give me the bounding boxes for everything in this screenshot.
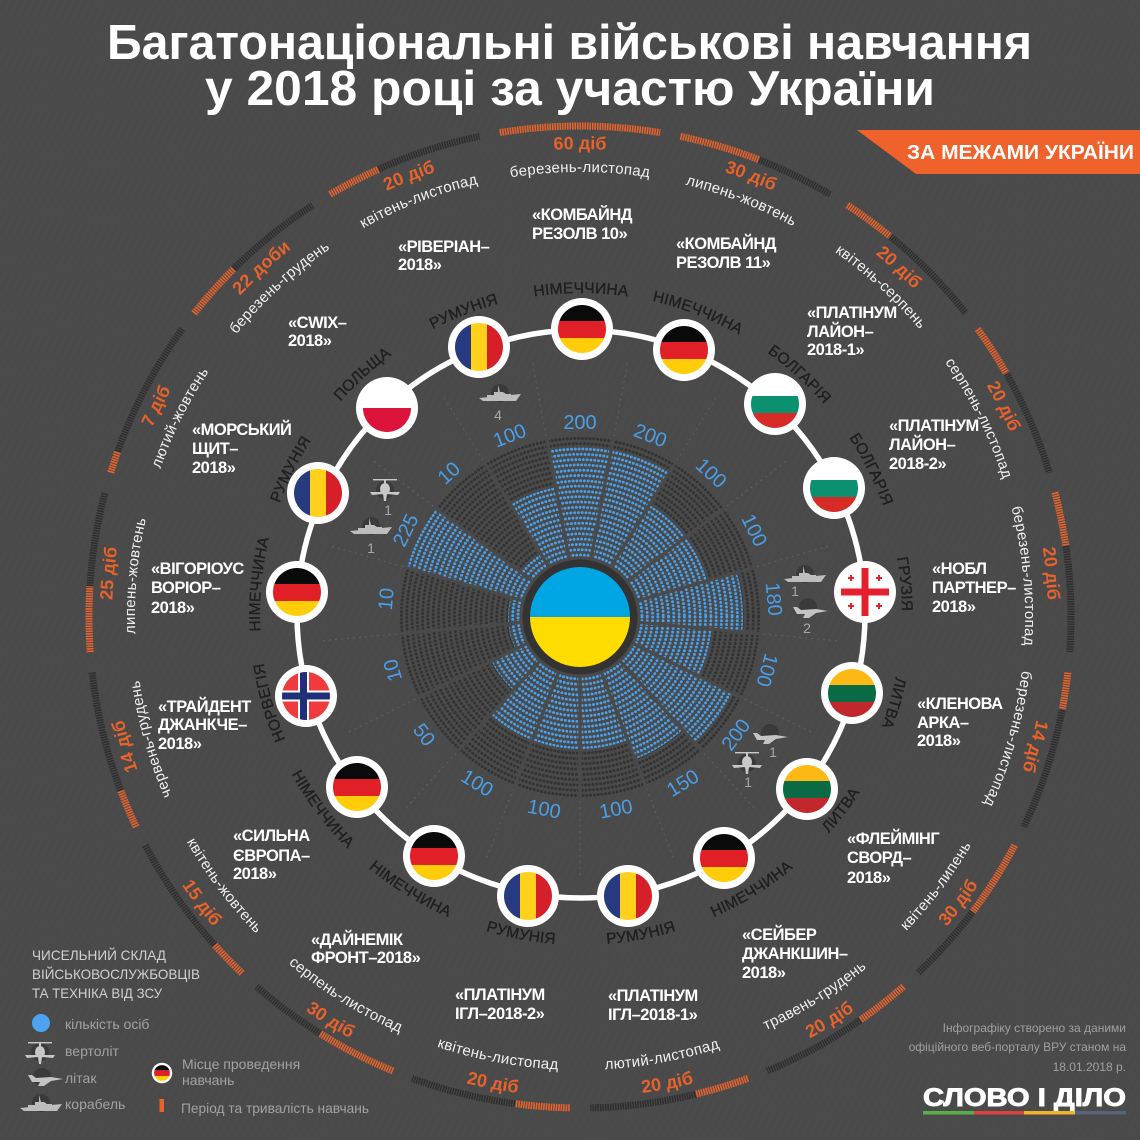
exercise names: «СЕЙБЕР: [742, 926, 816, 944]
exercise names: «ПЛАТІНУМ: [889, 417, 979, 435]
country names: БОЛГАРІЯ: [850, 432, 894, 506]
exercise names: 2018»: [158, 735, 202, 753]
exercise names: ЛАЙОН–: [889, 435, 956, 454]
country names: БОЛГАРІЯ: [768, 344, 832, 404]
exercise names: «ПЛАТІНУМ: [608, 987, 698, 1005]
date ranges: березень-грудень: [223, 234, 334, 339]
logo: СЛОВО І ДІЛО: [923, 1084, 1126, 1112]
personnel counts around the chart: 200: [718, 715, 755, 755]
exercise names: РЕЗОЛВ 11»: [676, 254, 771, 272]
legend: вертоліт: [65, 1043, 120, 1059]
durations in days: 20 діб: [986, 381, 1022, 430]
durations in days: 60 діб: [554, 136, 606, 153]
personnel counts around the chart: [375, 412, 786, 824]
country names: [249, 282, 913, 944]
exercise names: 2018-1»: [807, 341, 864, 359]
exercise names: «КЛЕНОВА: [917, 695, 1003, 713]
personnel counts around the chart: 100: [490, 420, 529, 452]
date ranges: серпень-листопад: [283, 952, 407, 1040]
exercise names: ДЖАНКЧЕ–: [158, 716, 247, 734]
personnel counts around the chart: 225: [389, 511, 424, 550]
legend: навчань: [182, 1072, 234, 1088]
chart: blue personnel dots per exercise: [408, 448, 744, 758]
exercise names: «ФЛЕЙМІНГ: [847, 830, 939, 848]
legend: літак: [65, 1070, 97, 1086]
personnel counts around the chart: 10: [375, 587, 399, 611]
equipment: ships, jets and helicopters with counts: 4: [494, 407, 502, 423]
exercise names: 2018»: [398, 256, 442, 274]
personnel counts around the chart: 100: [751, 651, 782, 689]
legend: ТА ТЕХНІКА ВІД ЗСУ: [32, 985, 162, 1001]
personnel counts around the chart: 10: [380, 656, 407, 684]
personnel counts around the chart: 100: [526, 796, 562, 824]
personnel counts around the chart: 100: [598, 796, 634, 824]
country names: НІМЕЧЧИНА: [370, 860, 449, 918]
equipment: ships, jets and helicopters with counts: [350, 384, 828, 790]
personnel counts around the chart: 100: [457, 766, 497, 802]
date ranges: квітень-листопад: [355, 167, 481, 233]
exercise names: 2018»: [847, 869, 891, 887]
country names: ПОЛЬЩА: [333, 348, 392, 401]
durations in days: 25 діб: [100, 547, 119, 600]
exercise names: «ДАЙНЕМІК: [311, 931, 403, 949]
equipment: ships, jets and helicopters with counts: 1: [769, 744, 777, 760]
source note: офіційного веб-порталу ВРУ станом на: [909, 1040, 1126, 1054]
exercise names: «КОМБАЙНД: [676, 235, 776, 253]
central Ukraine flag: [522, 560, 638, 674]
durations in days: 14 діб: [1024, 720, 1048, 774]
legend: кількість осіб: [65, 1016, 149, 1032]
exercise names: «КОМБАЙНД: [532, 206, 632, 224]
date ranges: березень-листопад: [510, 164, 649, 180]
legend: Період та тривалість навчань: [181, 1100, 369, 1116]
exercise names: 2018»: [288, 332, 332, 350]
equipment: ships, jets and helicopters with counts: 1: [367, 540, 375, 556]
date ranges: квітень-липень: [896, 837, 977, 936]
exercise names: «СИЛЬНА: [233, 827, 310, 845]
date ranges: липень-жовтень: [685, 178, 794, 226]
banner: abroad: [857, 130, 1140, 174]
date ranges: лютий-листопад: [602, 1035, 722, 1077]
personnel counts around the chart: 200: [631, 420, 670, 452]
date ranges: квітень-серпень: [836, 246, 922, 328]
date ranges: квітень-листопад: [435, 1034, 561, 1078]
title: у 2018 році за участю України: [205, 62, 935, 116]
exercise names: ДЖАНКШИН–: [742, 945, 848, 963]
country names: НІМЕЧЧИНА: [534, 282, 628, 296]
country names: НІМЕЧЧИНА: [710, 862, 794, 917]
personnel counts around the chart: 100: [736, 511, 771, 550]
durations in days: 20 діб: [466, 1072, 518, 1094]
durations in days: 20 діб: [384, 160, 434, 191]
title: Багатонаціональні військові навчання: [107, 16, 1032, 70]
sector dividers and spokes: [319, 359, 841, 879]
source note: Інфографіку створено за даними: [943, 1021, 1126, 1035]
country names: РУМУНІЯ: [270, 436, 310, 502]
equipment: ships, jets and helicopters with counts: 2: [803, 620, 811, 636]
exercise names: 2018»: [917, 732, 961, 750]
date ranges: травень-грудень: [759, 956, 872, 1037]
exercise names: 2018»: [192, 459, 236, 477]
durations in days: 20 діб: [1042, 547, 1061, 600]
durations in days: 15 діб: [182, 880, 223, 925]
date ranges: червень-грудень: [123, 677, 176, 802]
equipment: ships, jets and helicopters with counts: 1: [791, 583, 799, 599]
personnel counts around the chart: 100: [691, 454, 730, 493]
country names: НІМЕЧЧИНА: [653, 290, 741, 335]
legend: корабель: [65, 1096, 125, 1112]
legend: ВІЙСЬКОВОСЛУЖБОВЦІВ: [32, 965, 200, 982]
exercise names: ВОРІОР–: [151, 579, 221, 597]
exercise names: «CWIX–: [288, 314, 346, 332]
exercise names: ІГЛ–2018-1»: [608, 1006, 698, 1024]
personnel counts around the chart: 10: [434, 458, 465, 489]
durations in days: 20 діб: [642, 1070, 692, 1093]
durations in days: 30 діб: [938, 878, 976, 926]
exercise names: 2018»: [742, 964, 786, 982]
exercise names: ЛАЙОН–: [807, 322, 874, 341]
durations in days: 20 діб: [806, 1000, 852, 1038]
equipment: ships, jets and helicopters with counts: 1: [744, 774, 752, 790]
durations in days: 14 діб: [110, 721, 138, 772]
banner: abroad: ЗА МЕЖАМИ УКРАЇНИ: [907, 141, 1134, 164]
country names: РУМУНІЯ: [606, 921, 675, 944]
legend: ЧИСЕЛЬНИЙ СКЛАД: [32, 946, 166, 963]
equipment: ships, jets and helicopters with counts: 1: [384, 502, 392, 518]
legend: [20, 946, 369, 1116]
flags of host countries: [266, 298, 896, 927]
source note: 18.01.2018 р.: [1053, 1060, 1126, 1074]
country names: НІМЕЧЧИНА: [249, 538, 270, 631]
durations in days: 20 діб: [876, 246, 922, 288]
exercise names: 2018»: [932, 598, 976, 616]
exercise names: 2018»: [151, 599, 195, 617]
exercise names: ЄВРОПА–: [233, 847, 310, 865]
white ring connecting flags: [297, 330, 865, 898]
exercise names: АРКА–: [917, 714, 969, 732]
date ranges: липень-жовтень: [118, 515, 150, 636]
country names: РУМУНІЯ: [429, 294, 498, 329]
date ranges: квітень-жовтень: [180, 833, 267, 939]
exercise names: [151, 205, 1016, 1024]
title: [107, 16, 1032, 116]
exercise names: РЕЗОЛВ 10»: [532, 225, 627, 243]
exercise names: ПАРТНЕР–: [932, 579, 1016, 597]
personnel counts around the chart: 50: [408, 720, 439, 751]
legend: Місце проведення: [182, 1056, 300, 1072]
durations in days: 30 діб: [726, 161, 778, 190]
exercise names: «ПЛАТІНУМ: [807, 304, 897, 322]
durations in days: [100, 136, 1061, 1094]
exercise names: ІГЛ–2018-2»: [455, 1005, 545, 1023]
exercise names: 2018»: [233, 865, 277, 883]
date ranges: березень-листопад: [1012, 506, 1034, 646]
exercise names: «РІВЕРІАН–: [398, 238, 489, 256]
date ranges: лютий-жовтень: [145, 363, 213, 472]
country names: РУМУНІЯ: [486, 920, 555, 944]
exercise names: «ВІГОРІОУС: [151, 560, 244, 578]
durations in days: 22 доби: [232, 242, 290, 296]
personnel counts around the chart: 180: [761, 581, 786, 617]
date ranges: серпень-листопад: [946, 359, 1010, 480]
exercise names: ФРОНТ–2018»: [311, 949, 421, 967]
exercise names: 2018-2»: [889, 455, 946, 473]
exercise names: «ТРАЙДЕНТ: [158, 698, 251, 716]
personnel counts around the chart: 150: [663, 766, 703, 802]
source note: [909, 1021, 1126, 1074]
exercise names: СВОРД–: [847, 849, 911, 867]
country names: НІМЕЧЧИНА: [292, 770, 352, 849]
durations in days: 7 діб: [141, 384, 170, 426]
country names: ЛИТВА: [882, 676, 906, 726]
exercise names: «МОРСЬКИЙ: [192, 421, 291, 439]
date ranges: березень-листопад: [981, 672, 1032, 806]
personnel counts around the chart: 200: [563, 412, 597, 434]
date ranges: [126, 164, 1034, 1072]
country names: ЛИТВА: [822, 790, 860, 834]
chart backdrop: dark dotted personnel grid: [401, 438, 759, 796]
durations in days: 30 діб: [307, 1002, 356, 1037]
exercise names: «ПЛАТІНУМ: [455, 986, 545, 1004]
country names: ГРУЗІЯ: [897, 557, 913, 610]
exercise names: «НОБЛ: [932, 560, 986, 578]
exercise names: ЩИТ–: [192, 440, 238, 458]
country names: НОРВЕГІЯ: [253, 664, 286, 742]
